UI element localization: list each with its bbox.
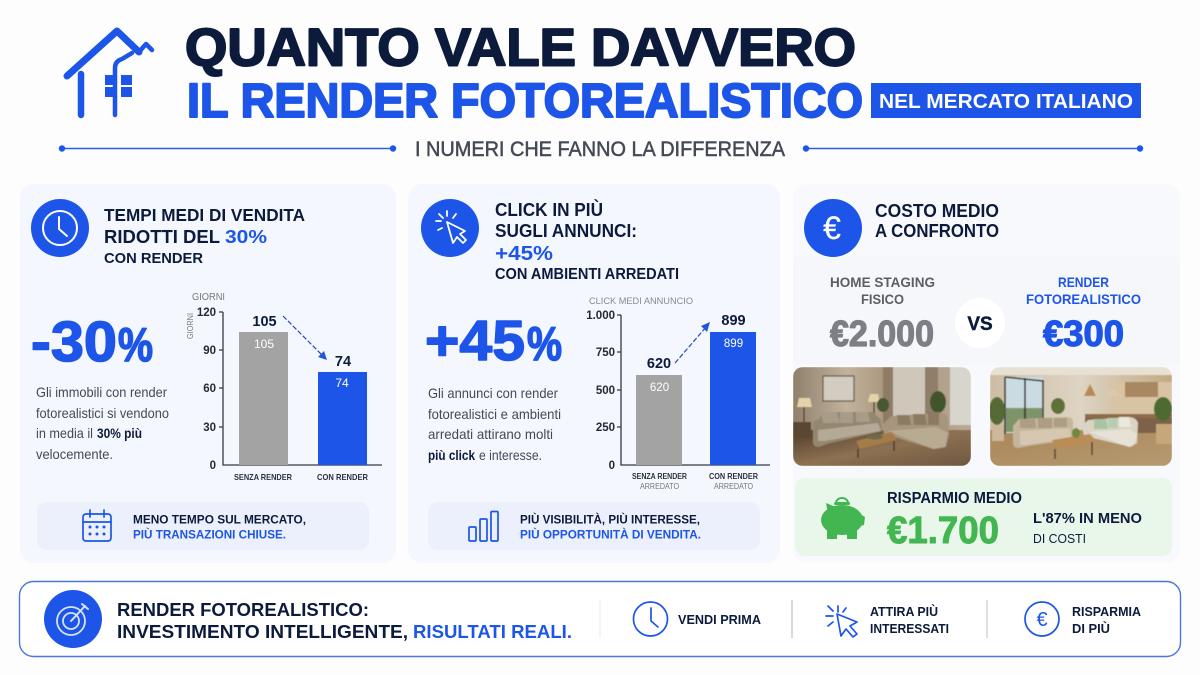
bar chart: click medi: 620 [647, 356, 671, 372]
icon: clock [31, 199, 89, 257]
footer message: RENDER FOTOREALISTICO: [117, 599, 369, 620]
bar chart: click medi: 250 [596, 422, 615, 434]
callout [428, 502, 760, 550]
savings text: RISPARMIO MEDIO [887, 490, 1022, 507]
text block: più click [428, 447, 475, 463]
panel: click sugli annunci [408, 184, 780, 563]
bar chart: click medi: CON RENDER [709, 472, 758, 481]
bar chart: click medi: 1.000 [586, 310, 615, 322]
title [185, 18, 863, 128]
heading [104, 205, 305, 267]
bar chart: giorni: 74 [335, 376, 349, 390]
bar chart: giorni [186, 292, 382, 482]
big number: +45 [425, 309, 525, 373]
bar chart: click medi: 620 [650, 382, 669, 394]
benefit: risparmia di più: € [1036, 609, 1048, 631]
bar chart: giorni: 30 [203, 422, 216, 434]
subtitle with rules [59, 138, 1143, 161]
text block: fotorealistici e ambienti [428, 406, 561, 422]
icon: cursor [421, 199, 479, 257]
benefit: vendi prima [634, 602, 762, 636]
savings text: DI COSTI [1033, 531, 1086, 546]
bar chart: giorni: 120 [197, 307, 216, 319]
heading: +45% [495, 243, 553, 265]
callout text: PIÙ TRANSAZIONI CHIUSE. [133, 526, 286, 542]
benefit: risparmia di più: DI PIÙ [1072, 621, 1110, 636]
text block: arredati attirano molti [428, 426, 553, 442]
home staging cost: FISICO [861, 291, 904, 307]
benefit: vendi prima: VENDI PRIMA [678, 612, 762, 627]
heading: CLICK IN PIÙ [495, 199, 603, 220]
badge: nel mercato italiano [871, 83, 1141, 118]
heading: CON AMBIENTI ARREDATI [495, 266, 679, 283]
callout [37, 502, 369, 550]
home staging cost [830, 274, 935, 354]
bar chart: giorni: 74 [335, 354, 351, 370]
badge: nel mercato italiano: NEL MERCATO ITALIANO [879, 90, 1133, 113]
heading: 30% [225, 226, 267, 247]
footer message: RISULTATI REALI. [413, 621, 572, 642]
callout: risparmio medio [795, 478, 1172, 556]
text block: in media il [36, 425, 93, 441]
text block: 30% più [97, 425, 142, 441]
image: render living room [989, 367, 1172, 466]
big number [31, 310, 153, 374]
bar chart: click medi: SENZA RENDER [632, 472, 687, 481]
bar chart: click medi: CLICK MEDI ANNUNCIO [589, 296, 693, 307]
benefit: attira più interessati: ATTIRA PIÙ [870, 604, 938, 619]
bar chart: giorni: 105 [252, 314, 277, 330]
savings text: L'87% IN MENO [1033, 510, 1142, 527]
heading [495, 199, 679, 283]
benefit: attira più interessati: INTERESSATI [870, 621, 949, 636]
benefit: risparmia di più: RISPARMIA [1072, 604, 1142, 619]
benefit: attira più interessati [826, 604, 949, 637]
subtitle with rules: I NUMERI CHE FANNO LA DIFFERENZA [415, 138, 785, 161]
bar chart: click medi: 0 [609, 460, 615, 472]
icon: target [44, 590, 102, 648]
big number: -30 [31, 310, 117, 374]
heading: CON RENDER [104, 250, 203, 267]
callout text [133, 512, 306, 542]
heading: SUGLI ANNUNCI: [495, 221, 637, 241]
icon: bars [469, 512, 498, 541]
render cost: €300 [1043, 313, 1124, 354]
savings text [887, 490, 1142, 552]
benefit: risparmia di più [1025, 602, 1142, 636]
savings text: €1.700 [887, 510, 999, 552]
home staging cost: €2.000 [830, 313, 934, 354]
heading: TEMPI MEDI DI VENDITA [104, 205, 305, 225]
panel: tempi di vendita [20, 184, 396, 563]
bar chart: click medi [586, 296, 770, 491]
callout text: PIÙ VISIBILITÀ, PIÙ INTERESSE, [520, 512, 700, 526]
icon: calendar [83, 510, 111, 541]
render cost: FOTOREALISTICO [1026, 291, 1141, 307]
bar chart: click medi: ARREDATO [714, 482, 753, 491]
title: QUANTO VALE DAVVERO [185, 18, 856, 78]
icon: house logo [67, 31, 152, 115]
text block [428, 385, 561, 463]
bar chart: giorni: CON RENDER [317, 472, 368, 482]
text block [36, 384, 169, 462]
bar chart: click medi: 899 [724, 338, 743, 350]
callout text: MENO TEMPO SUL MERCATO, [133, 512, 306, 526]
render cost: RENDER [1058, 274, 1109, 290]
icon: euro [804, 199, 862, 257]
heading [875, 201, 999, 241]
bar chart: click medi: 500 [596, 385, 615, 397]
footer message [117, 599, 572, 642]
footer banner [20, 582, 1180, 656]
bar chart: click medi: ARREDATO [640, 482, 679, 491]
title: IL RENDER FOTOREALISTICO [187, 75, 863, 128]
text block: velocemente. [36, 446, 113, 462]
heading: RIDOTTI DEL [104, 226, 220, 247]
home staging cost: HOME STAGING [830, 274, 935, 290]
icon: euro: € [823, 210, 841, 246]
bar chart: click medi: 750 [596, 347, 615, 359]
bar chart: giorni: 60 [203, 383, 216, 395]
bar chart: click medi: 899 [721, 313, 746, 329]
text block: e interesse. [479, 447, 542, 463]
image: staged living room [793, 367, 971, 466]
bar chart: giorni: 0 [210, 460, 216, 472]
vs badge [955, 298, 1005, 348]
text block: Gli immobili con render [36, 384, 167, 400]
bar chart: giorni: GIORNI [192, 292, 225, 303]
text block: Gli annunci con render [428, 385, 558, 401]
footer message: INVESTIMENTO INTELLIGENTE, [117, 621, 408, 642]
render cost [1026, 274, 1141, 354]
bar chart: giorni: SENZA RENDER [234, 472, 292, 482]
panel: costo medio [793, 184, 1180, 563]
big number: % [527, 317, 562, 370]
callout text: PIÙ OPPORTUNITÀ DI VENDITA. [520, 526, 701, 542]
vs badge: VS [967, 314, 993, 335]
bar chart: giorni: GIORNI [186, 313, 195, 339]
big number: % [118, 318, 153, 371]
heading: A CONFRONTO [875, 221, 999, 241]
icon: piggy bank [821, 498, 865, 539]
heading: COSTO MEDIO [875, 201, 999, 221]
callout text [520, 512, 701, 542]
bar chart: giorni: 90 [203, 345, 216, 357]
text block: fotorealistici si vendono [36, 405, 169, 421]
bar chart: giorni: 105 [254, 337, 274, 351]
